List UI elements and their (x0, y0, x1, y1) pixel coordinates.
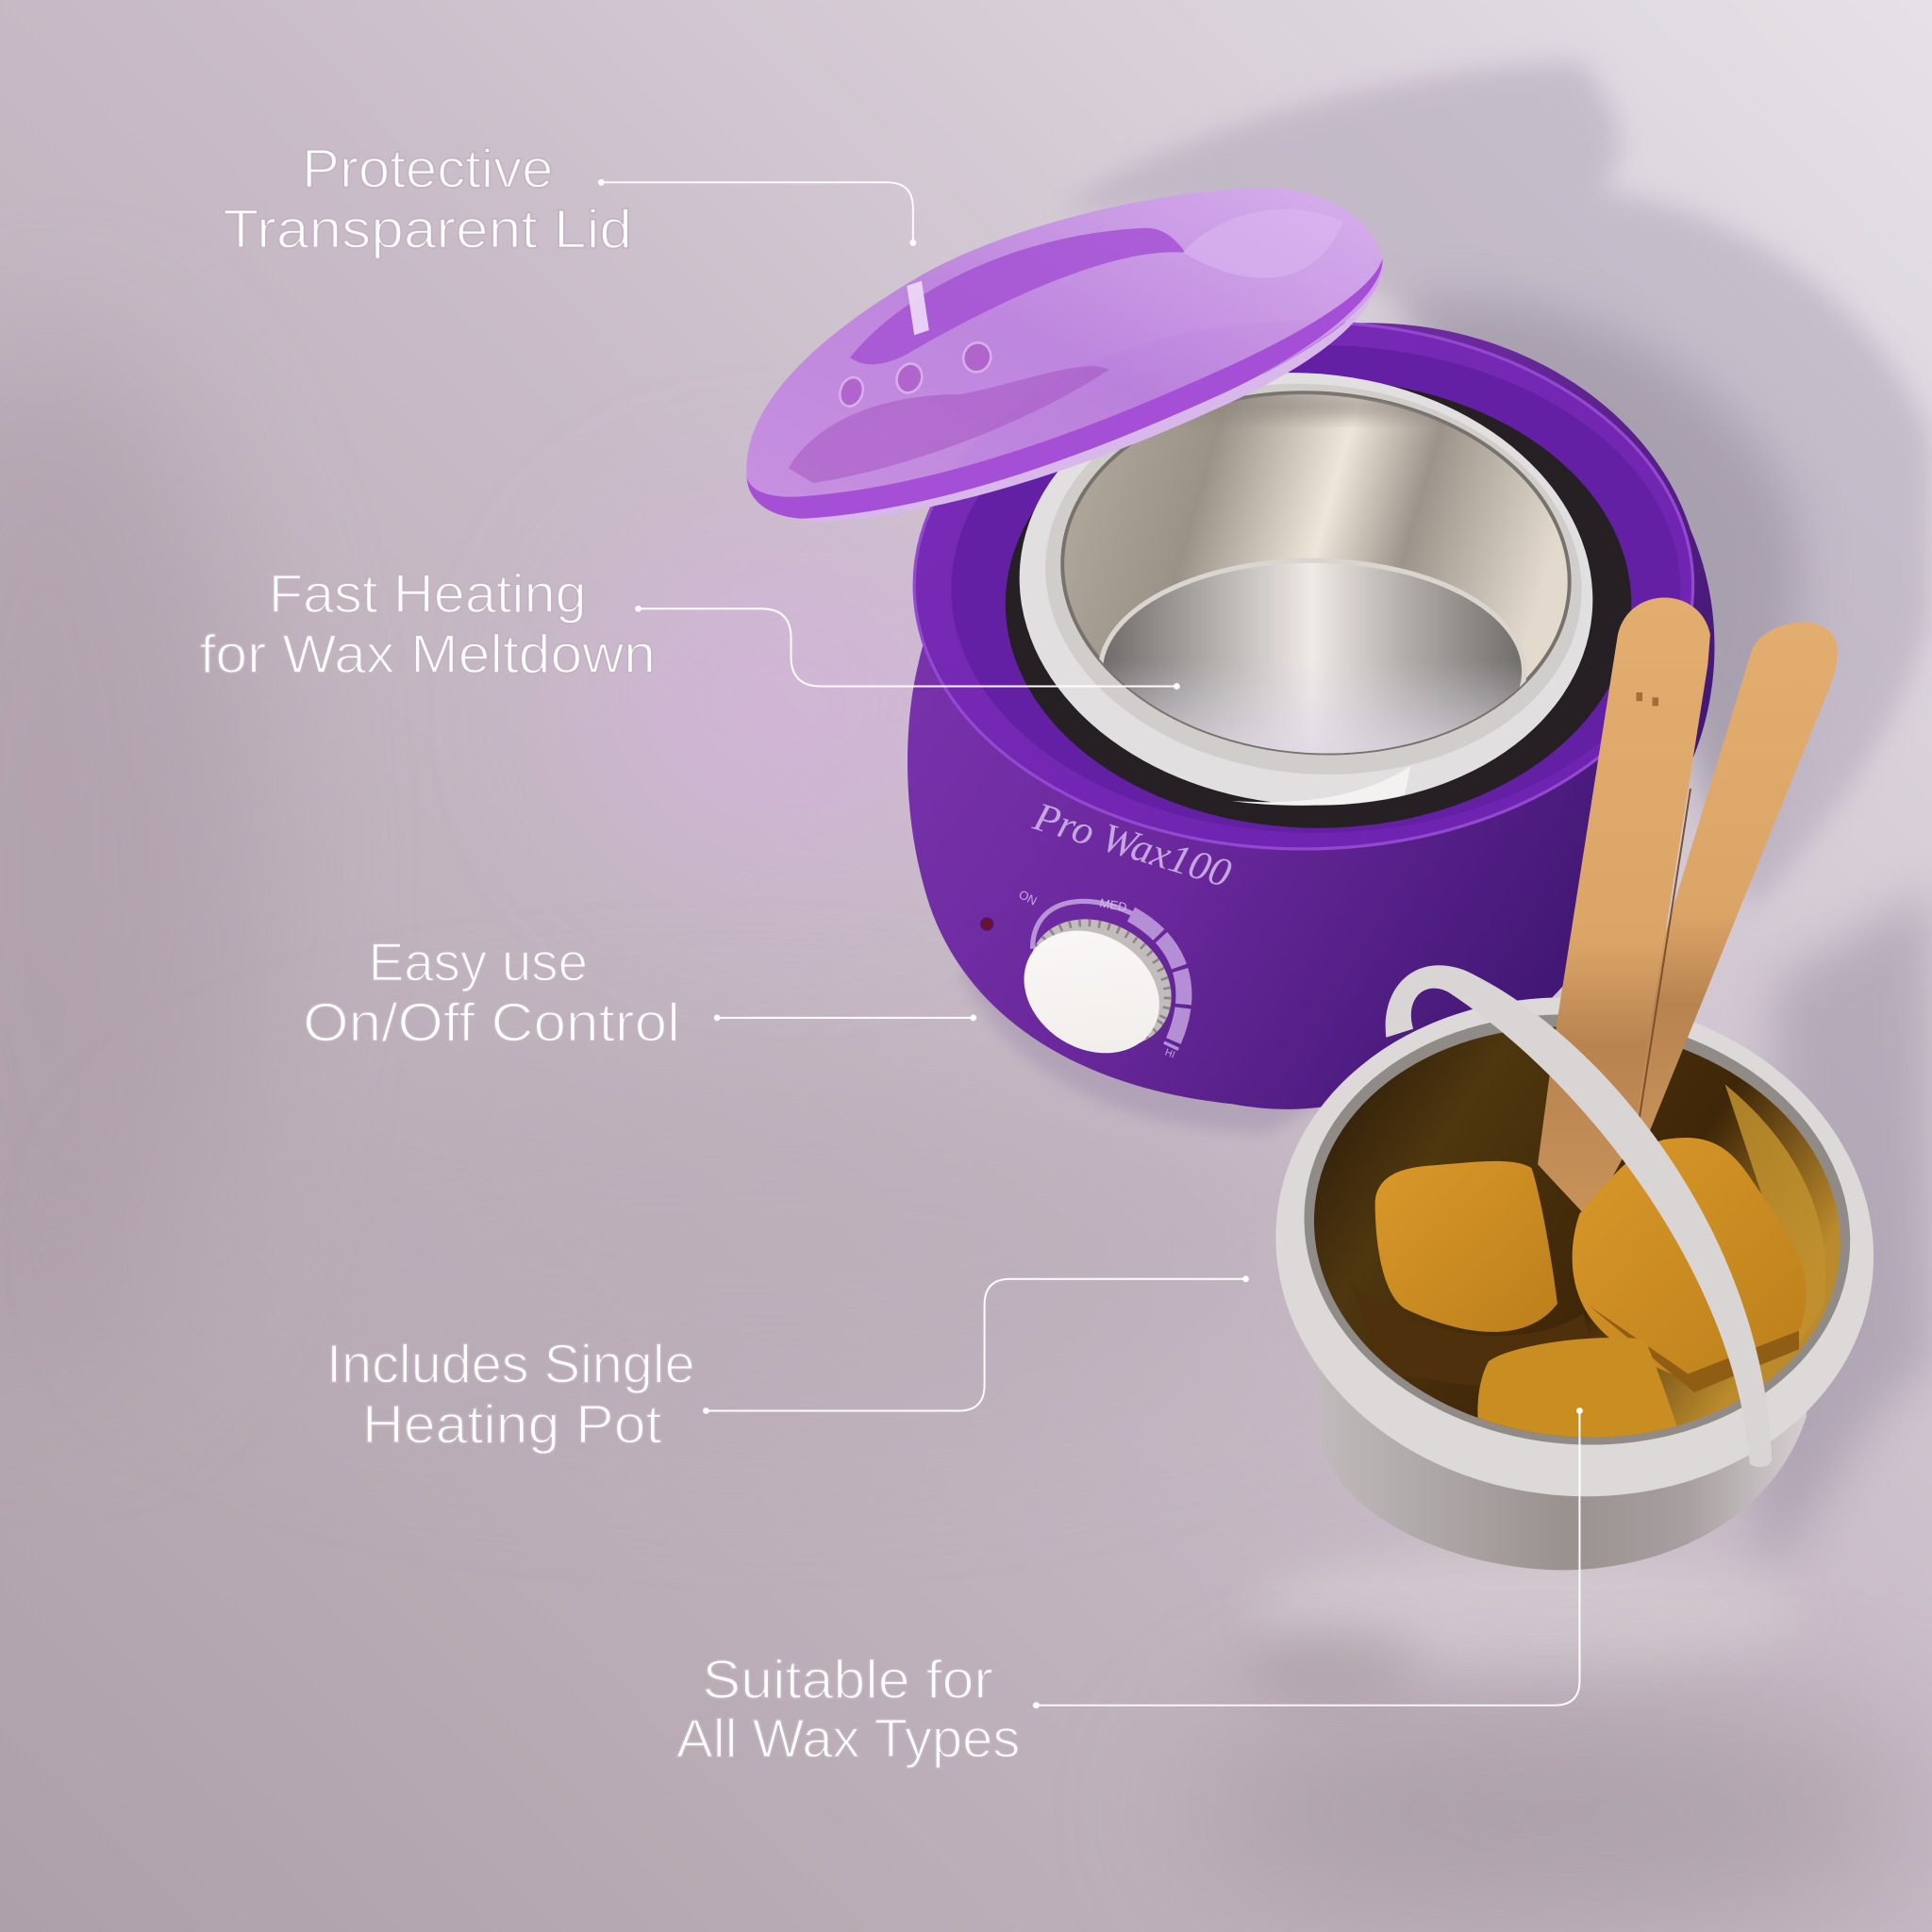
warmer body (908, 323, 1714, 1109)
leader line (1033, 1407, 1583, 1708)
cast shadows (961, 61, 1932, 1565)
temperature dial (1001, 887, 1195, 1078)
label text: Heating Pot (362, 1394, 661, 1455)
inner heating pot (1019, 373, 1592, 806)
temperature dial: ON (1016, 887, 1040, 908)
label text: On/Off Control (303, 993, 680, 1054)
pot outer base (1319, 1356, 1808, 1570)
power indicator light (981, 918, 993, 930)
label text (326, 1334, 695, 1455)
leader line (635, 606, 1180, 690)
leader line (703, 1275, 1249, 1414)
label text (200, 564, 656, 685)
label text: for Wax Meltdown (200, 625, 656, 685)
temperature dial: MED (1099, 895, 1128, 914)
wax cube: right (1573, 1138, 1807, 1380)
purple rim (914, 322, 1693, 849)
leader line (714, 1014, 976, 1021)
callout: Protective Transparent Lid (223, 140, 916, 260)
leader line (598, 179, 916, 246)
label text: Fast Heating (269, 564, 587, 625)
label text (223, 140, 632, 260)
label text: Protective (302, 140, 553, 200)
label text: All Wax Types (676, 1709, 1020, 1770)
pot handle (1386, 965, 1772, 1467)
pot interior (1283, 988, 1872, 1472)
label text: Transparent Lid (223, 200, 632, 260)
wax cube: front (1477, 1338, 1678, 1454)
callout: Easy use On/Off Control (303, 933, 976, 1054)
single heating pot (1251, 597, 1898, 1570)
lid vent holes (836, 339, 995, 409)
wooden spatulas (1538, 597, 1838, 1220)
wax cube: left (1375, 1161, 1557, 1332)
wax warmer unit (746, 189, 1714, 1109)
callout: Suitable for All Wax Types (676, 1407, 1583, 1770)
label text (303, 933, 680, 1054)
label text: Includes Single (326, 1334, 695, 1394)
brand text: Pro Wax100 (1027, 794, 1236, 896)
label text: Easy use (369, 933, 588, 993)
transparent lid (746, 189, 1383, 523)
label text: Suitable for (702, 1650, 993, 1710)
black gasket (1006, 379, 1631, 828)
temperature dial: HI (1163, 1048, 1176, 1060)
callout: Includes Single Heating Pot (326, 1275, 1249, 1455)
label text (676, 1650, 1020, 1770)
pot rim (1251, 968, 1898, 1525)
callout: Fast Heating for Wax Meltdown (200, 564, 1180, 690)
